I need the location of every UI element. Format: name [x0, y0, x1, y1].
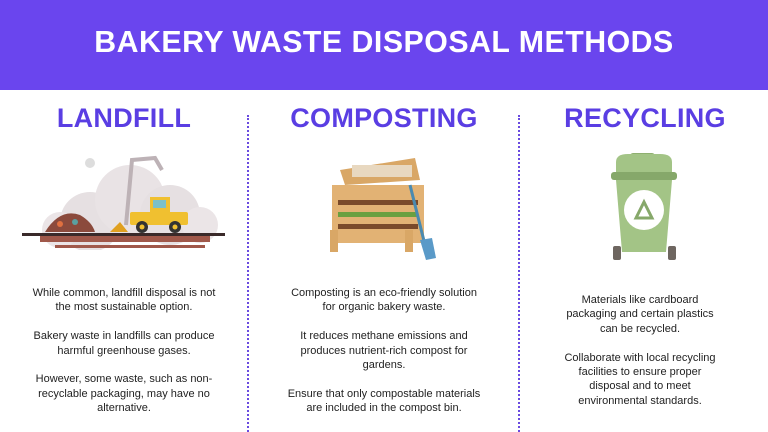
- text: recycling: environmental standards.: [578, 395, 702, 407]
- text: recycling: disposal and to meet: [589, 380, 691, 392]
- text: landfill: the most sustainable option.: [56, 301, 192, 313]
- heading: landfill: LANDFILL: [57, 103, 191, 133]
- text: recycling: can be recycled.: [600, 323, 680, 335]
- text: landfill: While common, landfill disposal is not: [33, 287, 215, 299]
- divider 1: [247, 115, 249, 432]
- text: recycling: packaging and certain plastics: [566, 308, 714, 320]
- text: composting: produces nutrient-rich compost for: [301, 345, 467, 357]
- text: landfill: However, some waste, such as non-: [36, 373, 212, 385]
- icon: landfill scene: [22, 156, 225, 250]
- text: recycling: facilities to ensure proper: [579, 366, 701, 378]
- icon: recycling bin: [611, 153, 677, 260]
- text: recycling: Collaborate with local recycling: [564, 352, 716, 364]
- heading: composting: COMPOSTING: [290, 103, 478, 133]
- text: landfill: [32, 287, 216, 414]
- icon: compost bin: [330, 158, 436, 260]
- text: composting: It reduces methane emissions and: [300, 330, 468, 342]
- title: BAKERY WASTE DISPOSAL METHODS: [94, 26, 674, 59]
- text: recycling: Materials like cardboard: [582, 294, 698, 306]
- header band: [0, 0, 768, 90]
- text: landfill: alternative.: [97, 402, 151, 414]
- text: recycling: [564, 294, 716, 407]
- text: composting: [288, 287, 480, 414]
- text: landfill: recyclable packaging, may have no: [38, 388, 210, 400]
- text: composting: are included in the compost bin.: [306, 402, 462, 414]
- text: composting: Composting is an eco-friendly solution: [291, 287, 477, 299]
- text: landfill: harmful greenhouse gases.: [57, 345, 191, 357]
- text: composting: gardens.: [363, 359, 405, 371]
- divider 2: [518, 115, 520, 432]
- text: composting: Ensure that only compostable materials: [288, 388, 480, 400]
- heading: recycling: RECYCLING: [564, 103, 726, 133]
- text: composting: for organic bakery waste.: [323, 301, 445, 313]
- text: landfill: Bakery waste in landfills can produce: [34, 330, 214, 342]
